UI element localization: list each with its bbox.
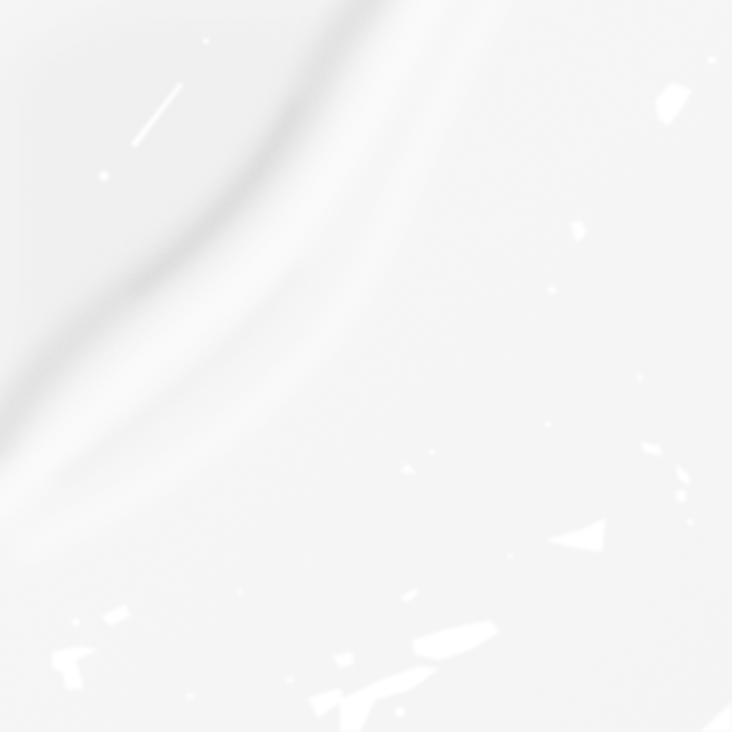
upper-left cream fold: [0, 0, 350, 450]
white flecks, right side: [400, 56, 716, 602]
dark crease: [0, 0, 375, 450]
specular highlights, upper left: [99, 38, 209, 181]
bright ridges beside the crease: [0, 0, 500, 550]
white flecks, bottom: [52, 590, 732, 732]
